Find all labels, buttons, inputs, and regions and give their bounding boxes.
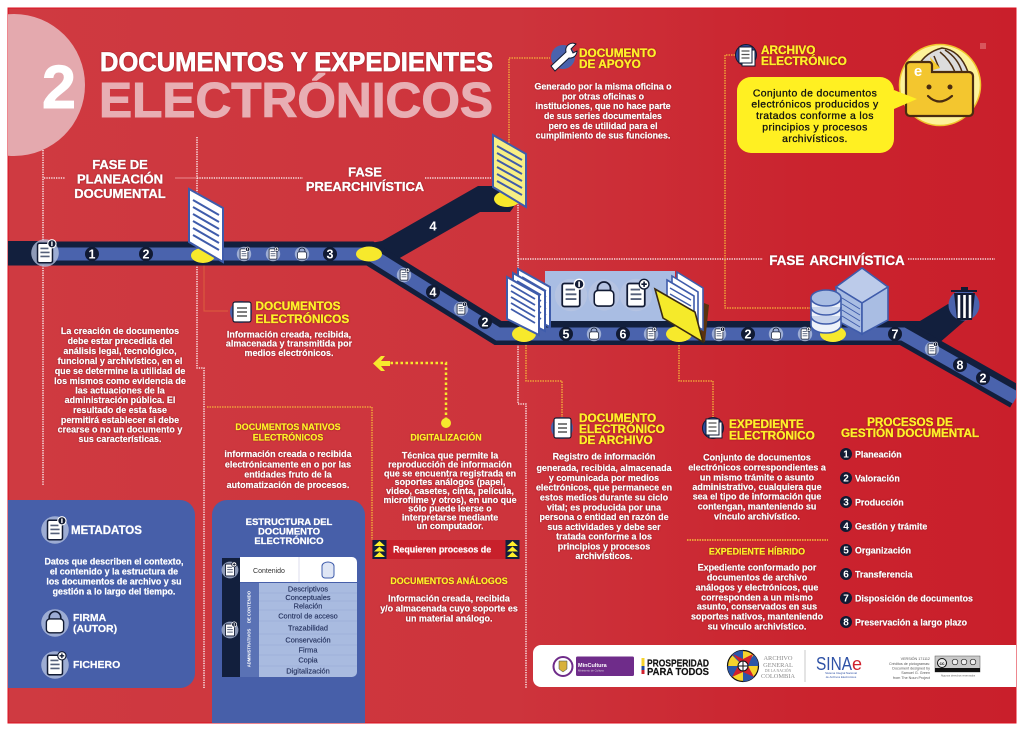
text: expediente electrónico: contengan, manteniendo su — [698, 502, 816, 512]
table: estructura: Firma — [299, 646, 318, 654]
panel: estructura del documento — [212, 500, 365, 723]
heading: documentos electrónicos: ELECTRÓNICOS — [256, 312, 349, 326]
callout: archivo electrónico: archivísticos. — [782, 134, 848, 145]
logo: creative commons — [935, 656, 980, 678]
heading: documento electrónico de archivo: ELECTRÓNICO — [579, 422, 665, 436]
text: fase de planeación: resultado de esta fase — [73, 405, 167, 415]
version credits: VERSIÓN 171112 — [901, 656, 930, 661]
version credits: Document designed by — [892, 666, 930, 670]
logo: Archivo General de la Nación — [727, 650, 795, 682]
list: procesos de gestión documental: Preservación a largo plazo — [855, 618, 968, 628]
icon: smiling folder — [900, 44, 980, 126]
text: fase de planeación: La creación de documentos — [61, 326, 179, 336]
node markers — [191, 191, 846, 342]
list: procesos de gestión documental: 4 — [843, 522, 849, 532]
icon: documento electrónico de archivo — [551, 417, 573, 439]
heading: documentos análogos: DOCUMENTOS ANÁLOGOS — [390, 576, 508, 586]
text: documentos nativos: información creada o recibida — [224, 449, 353, 459]
version credits: Samuel G. Green — [901, 671, 930, 675]
track step numbers: 2 — [143, 248, 150, 262]
list: procesos de gestión documental: 6 — [843, 570, 849, 580]
logo: Archivo General de la Nación: GENERAL — [763, 662, 793, 669]
text: fase de planeación: análisis legal, tecnológico, — [63, 346, 177, 356]
logo: Prosperidad para todos — [642, 658, 709, 678]
table: estructura: Copia — [298, 656, 319, 664]
heading: documentos nativos: ELECTRÓNICOS — [253, 432, 323, 442]
logo: SINAE: de Archivos Electrónicos — [826, 675, 857, 679]
panel: metadatos: METADATOS — [71, 525, 142, 537]
text: documentos nativos: automatización de procesos. — [227, 480, 349, 490]
heading: procesos de gestión documental: GESTIÓN DOCUMENTAL — [841, 427, 979, 440]
section number badge: 2 — [42, 53, 76, 121]
text: digitalización: video, casetes, cinta, película, — [386, 486, 514, 496]
heading: expediente electrónico: ELECTRÓNICO — [729, 428, 815, 442]
phase divider lines — [43, 137, 995, 688]
text: expediente híbrido: asunto, conservados en sus — [697, 602, 817, 612]
list: procesos de gestión documental — [840, 448, 973, 628]
table: estructura: Relación — [294, 602, 322, 610]
text: documento electrónico de archivo: tratada conforme a los — [556, 532, 652, 542]
track start icon — [31, 239, 59, 267]
version credits: from The Noun Project — [893, 676, 930, 680]
text: documento electrónico de archivo: Registro de información — [553, 452, 655, 462]
text: documento de apoyo: pero es de utilidad para el — [548, 121, 658, 131]
server and database — [811, 268, 888, 334]
list: procesos de gestión documental: 2 — [843, 474, 849, 484]
icon: smiling folder: e — [914, 63, 922, 80]
banner: requieren procesos: Requieren procesos de — [393, 544, 491, 554]
heading: expediente electrónico: EXPEDIENTE — [729, 417, 804, 431]
track step numbers: 3 — [327, 248, 334, 262]
table: estructura — [222, 557, 357, 677]
text: documento electrónico de archivo: principios y procesos — [558, 542, 650, 552]
text: documentos análogos: y/o almacenada cuyo soporte es — [380, 604, 518, 614]
text: documentos nativos: electrónicamente en o por las — [225, 460, 351, 470]
table: estructura: Control de acceso — [278, 612, 338, 620]
text: documento electrónico de archivo: vital; es producida por una — [547, 502, 662, 512]
list: procesos de gestión documental: Valoración — [855, 474, 900, 484]
panel: metadatos: gestión a lo largo del tiempo. — [53, 586, 175, 596]
track step numbers: 4 — [430, 286, 437, 300]
heading: documento electrónico de archivo: DE ARCHIVO — [579, 433, 653, 447]
heading: documentos electrónicos: DOCUMENTOS — [256, 299, 341, 313]
text: expediente electrónico: administrativo, cualquiera que — [692, 482, 822, 492]
panel: metadatos: (AUTOR) — [73, 623, 117, 635]
icon: metadatos — [41, 516, 69, 544]
text: documentos electrónicos: medios electrónicos. — [245, 348, 333, 358]
heading: archivo electrónico: ARCHIVO — [761, 43, 815, 57]
heading: expediente híbrido: EXPEDIENTE HÍBRIDO — [709, 546, 805, 556]
heading: documento de apoyo: DOCUMENTO — [579, 46, 656, 60]
text: digitalización: Técnica que permite la — [402, 450, 499, 460]
track step numbers: 2 — [482, 316, 489, 330]
heading: documento electrónico de archivo: DOCUMENTO — [579, 411, 656, 425]
logo: creative commons: cc — [939, 661, 945, 666]
section number badge — [0, 14, 85, 156]
trash icon — [948, 287, 980, 320]
corner mark — [980, 43, 986, 49]
list: procesos de gestión documental: Gestión y trámite — [855, 522, 927, 532]
callout: archivo electrónico: principios y procesos — [762, 122, 868, 134]
text: expediente híbrido: corresponden a un mismo — [701, 592, 813, 602]
phase label: prearchivística: FASE — [348, 164, 382, 180]
icon: expediente electrónico — [702, 418, 724, 438]
text: digitalización: microfilme y otros), en uno que — [383, 495, 517, 505]
track step numbers: 8 — [957, 358, 964, 372]
callout: archivo electrónico: electrónicos producidos y — [751, 100, 879, 110]
text: digitalización: reproducción de información — [388, 460, 512, 470]
title: ELECTRÓNICOS — [99, 72, 493, 128]
logo: Prosperidad para todos: PROSPERIDAD — [647, 658, 709, 670]
table: estructura: DE CONTENIDO — [246, 590, 252, 623]
track step numbers: 1 — [89, 248, 96, 262]
text: fase de planeación: los mismos como evidencia de — [54, 376, 186, 386]
document sheet: support — [493, 135, 526, 207]
callout: archivo electrónico: tratados conforme a los — [756, 111, 874, 122]
panel: metadatos: Datos que describen el contexto, — [44, 556, 184, 566]
text: documentos nativos: entidades fruto de la — [244, 470, 333, 480]
track step numbers: 4 — [429, 218, 437, 234]
text: expediente electrónico: sea el tipo de información que — [693, 492, 821, 502]
stored documents panel — [545, 271, 675, 321]
logo: MinCultura: Ministerio de Cultura — [578, 668, 604, 672]
text: documentos electrónicos: almacenada y transmitida por — [226, 338, 353, 348]
text: fase de planeación: las actuaciones de la — [75, 386, 166, 396]
table: estructura: ADMINISTRATIVOS — [246, 629, 252, 667]
phase label: prearchivística: PREARCHIVÍSTICA — [306, 179, 424, 194]
heading: procesos de gestión documental: PROCESOS DE — [867, 416, 953, 429]
text: digitalización: que se encuentra registrada en — [384, 468, 516, 478]
heading: documentos nativos: DOCUMENTOS NATIVOS — [235, 422, 341, 432]
text: documento electrónico de archivo: persona o entidad en razón de — [539, 512, 669, 522]
text: expediente electrónico: Conjunto de documentos — [703, 452, 811, 462]
callout: archivo electrónico: Conjunto de documentos — [753, 88, 877, 100]
text: fase de planeación: sus características. — [79, 434, 161, 444]
table: estructura: Contenido — [253, 568, 285, 575]
version credits: Créditos de pictogramas: — [889, 662, 930, 666]
logo: creative commons: Algunos derechos reservados — [941, 674, 976, 678]
text: expediente electrónico: vínculo archivístico. — [714, 512, 800, 522]
text: documentos electrónicos: Información creada, recibida, — [227, 330, 351, 340]
text: digitalización: un computador. — [416, 521, 484, 531]
text: digitalización: interpretarse mediante — [402, 512, 498, 522]
table: estructura: Conceptuales — [285, 593, 331, 602]
text: expediente híbrido: su vínculo archivístico. — [708, 622, 806, 632]
logo: SINAE: Sistema Integral Nacional — [825, 671, 857, 675]
text: fase de planeación: debe estar precedida del — [68, 336, 172, 346]
text: documento de apoyo: por otras oficinas o — [562, 92, 645, 102]
panel: metadatos — [8, 500, 195, 688]
list: procesos de gestión documental: 3 — [843, 498, 849, 508]
text: fase de planeación: crearse o no un documento y — [58, 424, 182, 434]
text: documento de apoyo: de sus series documentales — [544, 111, 662, 121]
expediente folder — [655, 272, 709, 342]
text: fase de planeación: administración pública. El — [65, 395, 175, 405]
track step numbers: 2 — [745, 328, 752, 342]
document stack — [507, 269, 550, 335]
list: procesos de gestión documental: 7 — [843, 594, 849, 604]
track step numbers: 2 — [980, 372, 987, 386]
logo: Archivo General de la Nación: ARCHIVO — [763, 655, 793, 662]
track small icons — [237, 247, 939, 356]
text: documento electrónico de archivo: estos medios durante su ciclo — [540, 492, 669, 502]
text: expediente híbrido: análogos y electrónicos, que — [696, 582, 818, 592]
text: digitalización: soportes análogos (papel, — [395, 477, 505, 487]
track step numbers: 7 — [892, 328, 899, 342]
divider: expediente híbrido — [687, 539, 828, 541]
list: procesos de gestión documental: Disposición de documentos — [855, 594, 973, 604]
text: documento electrónico de archivo: generada, recibida, almacenada — [536, 463, 673, 473]
table: estructura: Conservación — [285, 636, 331, 644]
track step numbers — [85, 218, 990, 386]
list: procesos de gestión documental: 8 — [843, 618, 849, 628]
text: documento de apoyo: instituciones, que no hace parte — [535, 101, 671, 111]
logo: Archivo General de la Nación: DE LA NACIÓN — [765, 668, 792, 673]
table: estructura: Trazabilidad — [288, 624, 328, 632]
banner: requieren procesos — [372, 540, 520, 559]
text: documento electrónico de archivo: archivísticos. — [575, 551, 633, 561]
list: procesos de gestión documental: Transferencia — [855, 570, 913, 580]
panel: metadatos: FICHERO — [73, 659, 120, 671]
title: DOCUMENTOS Y EXPEDIENTES — [100, 47, 493, 77]
list: procesos de gestión documental: Planeación — [855, 450, 902, 460]
text: expediente híbrido: documentos de archivo — [707, 572, 808, 582]
icon: archivo electrónico — [736, 44, 756, 66]
panel: metadatos: los documentos de archivo y su — [46, 576, 182, 586]
text: expediente híbrido: soportes nativos, manteniendo — [691, 612, 824, 622]
icon: documentos electrónicos — [230, 301, 252, 323]
logo: Archivo General de la Nación: COLOMBIA — [761, 673, 795, 680]
heading: archivo electrónico: ELECTRÓNICO — [761, 54, 847, 68]
panel: metadatos: FIRMA — [73, 612, 107, 624]
heading: digitalización: DIGITALIZACIÓN — [410, 432, 482, 442]
logo: Prosperidad para todos: PARA TODOS — [647, 666, 709, 678]
title — [99, 47, 493, 128]
track step numbers: 6 — [620, 328, 627, 342]
text: documento de apoyo: cumplimiento de sus funciones. — [536, 130, 670, 140]
track step numbers: 5 — [563, 328, 570, 342]
text: documentos análogos: un material análogo. — [406, 614, 492, 624]
timeline track — [8, 186, 1016, 398]
text: fase de planeación: funcional y archivístico, en el — [58, 356, 182, 366]
text: documentos análogos: Información creada, recibida — [388, 594, 511, 604]
text: expediente híbrido: Expediente conformado por — [698, 562, 817, 572]
logo: MinCultura — [554, 656, 634, 676]
panel: estructura del documento: DOCUMENTO — [258, 526, 320, 538]
table: estructura: Digitalización — [286, 666, 330, 676]
phase label: planeación: PLANEACIÓN — [77, 172, 163, 186]
text: expediente electrónico: un mismo trámite o asunto — [700, 472, 815, 482]
text: fase de planeación: que se determine la utilidad de — [55, 366, 185, 376]
list: procesos de gestión documental: Producción — [855, 498, 904, 508]
heading: documento de apoyo: DE APOYO — [579, 57, 641, 71]
text: expediente electrónico: electrónicos correspondientes a — [688, 462, 827, 472]
phase label: planeación: FASE DE — [92, 157, 148, 172]
list: procesos de gestión documental: 1 — [843, 450, 849, 460]
logo: MinCultura: MinCultura — [578, 663, 608, 669]
text: digitalización: sólo puede leerse o — [408, 504, 492, 514]
arrow: digitalización — [373, 356, 451, 428]
connector lines — [204, 55, 812, 540]
table: estructura: Descriptivos — [288, 584, 328, 594]
logo: SINAE: SINA — [816, 654, 852, 674]
panel: estructura del documento: ELECTRÓNICO — [254, 535, 324, 547]
document sheet: electronic — [189, 189, 223, 262]
logos bar — [533, 645, 1016, 687]
text: documento electrónico de archivo: electrónicos, que permanece en — [536, 482, 672, 492]
logo: SINAE: e — [852, 654, 862, 674]
list: procesos de gestión documental: Organización — [855, 546, 911, 556]
text: documento electrónico de archivo: sus actividades y debe ser — [547, 522, 661, 532]
panel: metadatos: el contenido y la estructura de — [50, 566, 178, 576]
panel: estructura del documento: ESTRUCTURA DEL — [246, 517, 333, 528]
text: fase de planeación: permitirá establecer si debe — [61, 415, 179, 425]
list: procesos de gestión documental: 5 — [843, 546, 849, 556]
phase label: planeación: DOCUMENTAL — [74, 186, 166, 201]
text: documento electrónico de archivo: y comunicada por medios — [549, 473, 659, 483]
phase label: archivística: FASE ARCHIVÍSTICA — [769, 253, 905, 268]
icon: wrench — [551, 43, 577, 71]
text: documento de apoyo: Generado por la misma oficina o — [534, 82, 672, 92]
callout: archivo electrónico — [737, 77, 917, 153]
